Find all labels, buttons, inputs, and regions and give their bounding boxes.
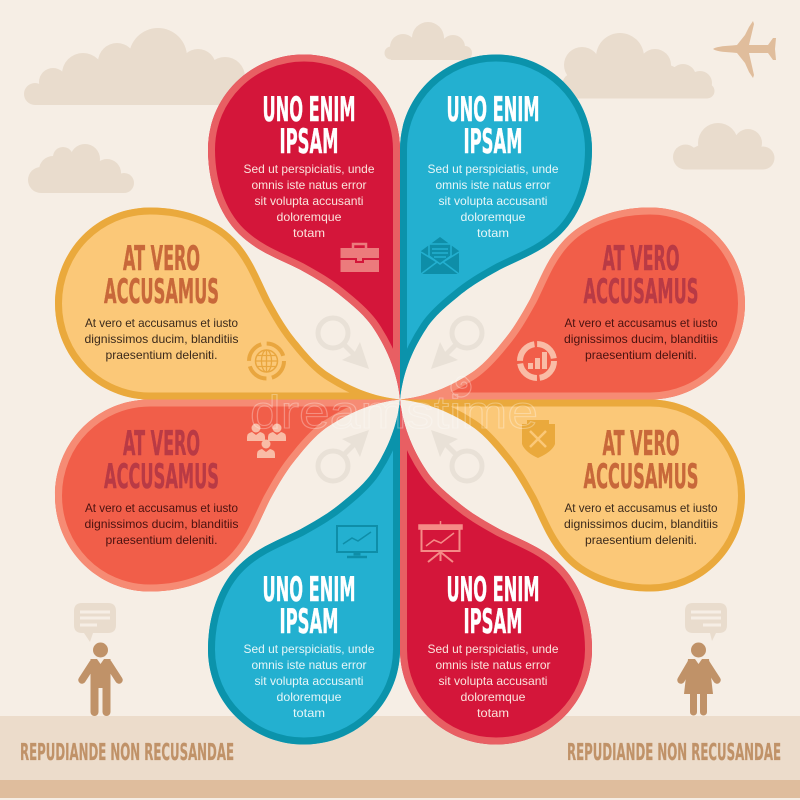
body text: dignissimos ducim, blanditiis [564, 332, 718, 346]
body text: dignissimos ducim, blanditiis [84, 517, 238, 531]
body text: dignissimos ducim, blanditiis [564, 517, 718, 531]
heading: AT VERO [602, 239, 680, 279]
icon: donut chart [520, 344, 554, 378]
cloud: middle left [28, 144, 134, 193]
body text: totam [293, 226, 325, 240]
petal: bottom right red: UNO ENIM [446, 570, 540, 610]
body text: praesentium deleniti. [585, 348, 697, 362]
icon: briefcase [340, 244, 379, 272]
symbol: upper left [318, 318, 369, 369]
body text: Sed ut perspiciatis, unde [244, 162, 375, 176]
heading: IPSAM [280, 602, 338, 642]
petal: left lower orange [55, 400, 400, 592]
symbol: lower left [318, 430, 369, 481]
figure [681, 642, 717, 716]
body text: Sed ut perspiciatis, unde [428, 642, 559, 656]
petal: left lower orange: ACCUSAMUS [104, 457, 219, 497]
heading: IPSAM [464, 602, 522, 642]
body text: At vero et accusamus et iusto [85, 316, 238, 330]
body text: praesentium deleniti. [585, 533, 697, 547]
body text: omnis iste natus error [436, 658, 550, 672]
petal: bottom left blue [208, 400, 400, 744]
body text: sit volupta accusanti [254, 194, 364, 208]
heading: IPSAM [280, 122, 338, 162]
icon: airplane [713, 21, 776, 78]
body text: doloremque [460, 210, 526, 224]
icon: monitor with line chart [337, 526, 377, 557]
icon: people [247, 424, 286, 458]
body text: totam [477, 706, 509, 720]
body text: sit volupta accusanti [438, 194, 548, 208]
ground band [0, 716, 800, 780]
petal: right lower yellow [400, 400, 745, 592]
body text: totam [477, 226, 509, 240]
cloud: top left [24, 28, 245, 105]
watermark word: dreamstime [250, 386, 538, 438]
icon: envelope [421, 237, 459, 274]
cloud: top right [562, 33, 714, 98]
petal: left upper yellow [55, 208, 400, 400]
clouds [24, 22, 774, 193]
petal: bottom right red [400, 400, 592, 744]
person: man with speech bubble [74, 603, 119, 716]
figure [82, 642, 119, 716]
symbol: upper right [431, 318, 482, 369]
icon: presentation board [419, 521, 462, 562]
gender symbols in the gaps between petals [318, 318, 482, 481]
petal: top left red: UNO ENIM [262, 90, 356, 130]
body text: At vero et accusamus et iusto [564, 316, 718, 330]
icon: globe with arrows [249, 344, 284, 378]
heading: AT VERO [123, 424, 200, 464]
speech bubble [685, 603, 727, 641]
cloud: middle right [673, 123, 774, 170]
body text: doloremque [276, 690, 342, 704]
body text: Sed ut perspiciatis, unde [244, 642, 375, 656]
petal: top right blue: UNO ENIM [446, 90, 540, 130]
watermark spiral [451, 376, 471, 397]
footer label left: REPUDIANDE NON RECUSANDAE [20, 738, 234, 766]
ground strip [0, 780, 800, 798]
body text: doloremque [460, 690, 526, 704]
body text: praesentium deleniti. [106, 348, 218, 362]
body text: At vero et accusamus et iusto [85, 501, 238, 515]
body text: sit volupta accusanti [438, 674, 548, 688]
body text: praesentium deleniti. [106, 533, 218, 547]
body text: totam [293, 706, 325, 720]
body text: doloremque [276, 210, 342, 224]
body text: dignissimos ducim, blanditiis [84, 332, 238, 346]
symbol: lower right [431, 430, 482, 481]
body text: sit volupta accusanti [254, 674, 364, 688]
petal: top left red [208, 54, 400, 400]
body text: At vero et accusamus et iusto [564, 501, 718, 515]
person: woman with speech bubble [681, 603, 727, 716]
icon: shield with crossed arrows [522, 420, 555, 458]
body text: omnis iste natus error [436, 178, 550, 192]
petal: left upper yellow: ACCUSAMUS [104, 272, 219, 312]
petal: top right blue [400, 54, 592, 400]
body text: Sed ut perspiciatis, unde [428, 162, 559, 176]
heading: IPSAM [464, 122, 522, 162]
petal: right upper orange [400, 208, 745, 400]
watermark [250, 376, 538, 438]
cloud: top centre [384, 22, 472, 60]
body text: omnis iste natus error [252, 178, 366, 192]
speech bubble [74, 603, 116, 642]
heading: AT VERO [602, 424, 680, 464]
heading: AT VERO [123, 239, 200, 279]
body text: omnis iste natus error [252, 658, 366, 672]
petal: bottom left blue: UNO ENIM [262, 570, 356, 610]
